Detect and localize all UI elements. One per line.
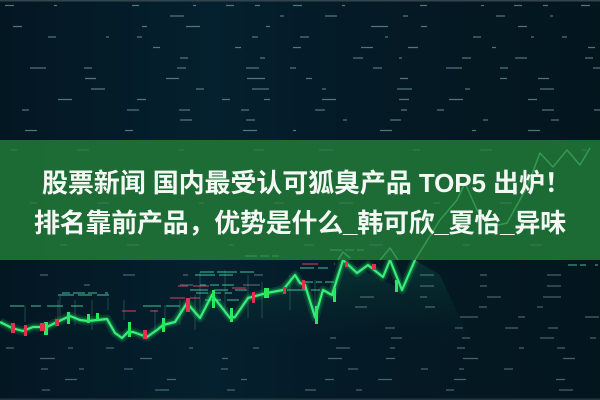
- green title band: [0, 140, 600, 260]
- title: [34, 168, 571, 238]
- title: 股票新闻 国内最受认可狐臭产品 TOP5 出炉！: [42, 168, 571, 198]
- line chart: [0, 260, 415, 339]
- title: 排名靠前产品，优势是什么_韩可欣_夏怡_异味: [34, 208, 566, 238]
